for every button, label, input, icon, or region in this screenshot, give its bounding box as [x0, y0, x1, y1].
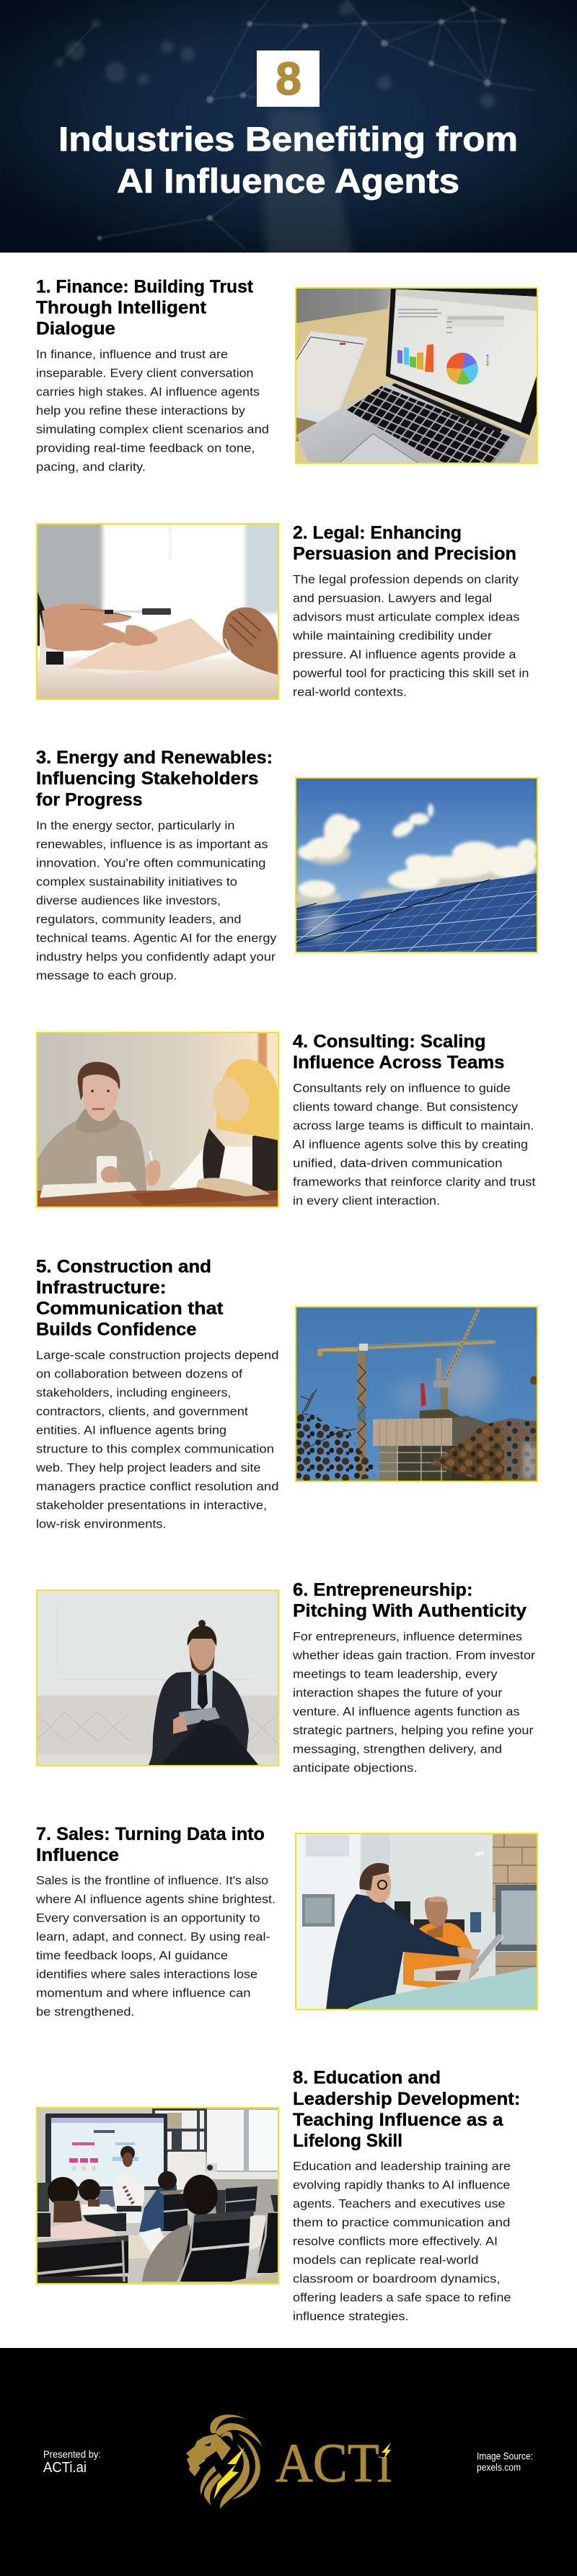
text: construction: managers practice conflict resolution and — [36, 1479, 278, 1494]
text: entrepreneurship: venture. AI influence agents function as — [293, 1704, 519, 1719]
photo: cranes over building — [295, 1306, 538, 1482]
badge: number 8 — [257, 51, 320, 107]
photo: laptop with charts — [295, 287, 538, 464]
text: construction: contractors, clients, and government — [36, 1404, 248, 1419]
heading: energy — [36, 748, 273, 810]
text: entrepreneurship: messaging, strengthen delivery, and — [293, 1742, 502, 1756]
text: energy: industry helps you confidently adapt your — [36, 950, 276, 964]
text: sales: Every conversation is an opportunity to — [36, 1911, 260, 1925]
text: energy: technical teams. Agentic AI for the energy — [36, 931, 277, 945]
text: sales: time feedback loops, AI guidance — [36, 1948, 228, 1963]
text: construction: web. They help project leaders and site — [35, 1460, 260, 1475]
heading: energy: for Progress — [36, 789, 143, 810]
text: consulting: in every client interaction. — [293, 1193, 440, 1208]
text: finance: pacing, and clarity. — [36, 460, 146, 473]
text: energy: regulators, community leaders, and — [36, 912, 241, 926]
text: entrepreneurship: interaction shapes the future of your — [293, 1686, 503, 1700]
image source: pexels.com — [477, 2461, 521, 2473]
text: sales: Sales is the frontline of influence. It's also — [36, 1873, 268, 1888]
heading: sales: 7. Sales: Turning Data into — [36, 1824, 265, 1844]
text: education: them to practice communication and — [293, 2215, 511, 2230]
panel: finance — [36, 277, 538, 473]
text: education: resolve conflicts more effectively. AI — [293, 2234, 498, 2248]
text: construction: on collaboration between dozens of — [36, 1367, 242, 1381]
text: construction: structure to this complex communication — [36, 1442, 274, 1456]
heading: education: Leadership Development: — [293, 2089, 521, 2109]
heading: energy: Influencing Stakeholders — [36, 768, 258, 789]
icon: lion head — [186, 2414, 263, 2509]
heading: education: Lifelong Skill — [293, 2131, 402, 2151]
text: education: influence strategies. — [293, 2309, 408, 2323]
text: legal: pressure. AI influence agents provide a — [293, 648, 516, 661]
text: finance: help you refine these interactions by — [36, 404, 246, 417]
text: construction: stakeholder presentations in interactive, — [36, 1498, 267, 1512]
text: sales: identifies where sales interactions lose — [36, 1967, 257, 1981]
header banner — [0, 0, 577, 260]
photo: classroom presentation — [36, 2107, 279, 2284]
text: sales — [35, 1873, 276, 2019]
panel: energy and renewables — [36, 748, 538, 983]
text: finance: providing real-time feedback on tone, — [36, 442, 255, 455]
text: energy: innovation. You're often communicating — [36, 856, 266, 870]
text: sales: learn, adapt, and connect. By using real- — [36, 1929, 270, 1944]
image source — [477, 2450, 533, 2473]
logo: lion and ACTi wordmark — [186, 2414, 392, 2509]
text: entrepreneurship: For entrepreneurs, influence determines — [293, 1629, 522, 1644]
text: energy — [36, 818, 277, 983]
title: Industries Benefiting from — [58, 120, 518, 158]
text: energy: In the energy sector, particularly in — [36, 818, 235, 833]
heading: finance: Through Intelligent — [36, 297, 207, 317]
panel: sales — [35, 1824, 538, 2019]
text: construction: stakeholders, including engineers, — [36, 1385, 231, 1400]
text: energy: renewables, influence is as important as — [36, 837, 268, 851]
text: legal — [292, 573, 529, 698]
text: construction — [35, 1348, 278, 1531]
text: education: agents. Teachers and executives use — [293, 2196, 505, 2211]
heading: consulting: Influence Across Teams — [293, 1052, 505, 1072]
photo: signing documents — [36, 523, 279, 700]
text: education: evolving rapidly thanks to AI influence — [293, 2178, 511, 2192]
icon: lightning bolt — [382, 2443, 391, 2459]
heading: legal: Persuasion and Precision — [293, 544, 516, 564]
wordmark: ACTi — [276, 2433, 392, 2494]
heading: entrepreneurship: 6. Entrepreneurship: — [293, 1580, 473, 1600]
text: construction: Large-scale construction projects depend — [36, 1348, 278, 1362]
text: legal: The legal profession depends on clarity — [293, 573, 519, 586]
text: education: offering leaders a safe space to refine — [293, 2290, 511, 2305]
heading: finance — [36, 277, 254, 339]
text: energy: diverse audiences like investors, — [36, 893, 221, 908]
text: energy: complex sustainability initiatives to — [36, 875, 237, 889]
panel: construction and infrastructure — [35, 1257, 538, 1531]
text: consulting — [293, 1081, 536, 1208]
text: finance: In finance, influence and trust are — [36, 348, 228, 361]
heading: construction: 5. Construction and — [36, 1257, 211, 1277]
text: education: Education and leadership training are — [293, 2159, 511, 2173]
text: legal: advisors must articulate complex ideas — [293, 610, 519, 623]
text: entrepreneurship: strategic partners, helping you refine your — [293, 1723, 534, 1738]
text: education — [293, 2159, 511, 2323]
photo: businessman with tablet on sofa — [36, 1590, 279, 1766]
text: entrepreneurship: meetings to team leadership, every — [293, 1667, 498, 1681]
text: finance: simulating complex client scenarios and — [36, 423, 269, 436]
text: consulting: frameworks that reinforce clarity and trust — [293, 1175, 536, 1189]
text: legal: while maintaining credibility under — [292, 629, 492, 642]
text: sales: where AI influence agents shine brightest. — [35, 1892, 276, 1906]
text: finance — [36, 348, 269, 473]
heading: construction: Infrastructure: — [36, 1277, 166, 1297]
heading: finance: Dialogue — [36, 319, 115, 339]
heading: education — [293, 2068, 521, 2151]
title — [58, 120, 518, 200]
text: consulting: across large teams is difficult to maintain. — [293, 1118, 534, 1133]
panel: education and leadership — [36, 2068, 521, 2323]
text: entrepreneurship — [292, 1629, 535, 1775]
text: finance: carries high stakes. AI influence agents — [36, 385, 260, 398]
text: construction: entities. AI influence agents bring — [36, 1423, 226, 1437]
heading: legal — [293, 522, 516, 564]
heading: energy: 3. Energy and Renewables: — [36, 748, 273, 768]
title: AI Influence Agents — [117, 162, 459, 200]
heading: entrepreneurship — [293, 1580, 527, 1621]
text: entrepreneurship: anticipate objections. — [293, 1761, 417, 1775]
text: consulting: unified, data-driven communication — [293, 1156, 502, 1170]
photo: solar panels and sky — [295, 777, 538, 953]
heading: consulting: 4. Consulting: Scaling — [293, 1032, 486, 1052]
text: finance: inseparable. Every client conversation — [36, 367, 254, 380]
badge: number 8: 8 — [276, 53, 301, 105]
text: consulting: AI influence agents solve this by creating — [293, 1137, 528, 1152]
heading: legal: 2. Legal: Enhancing — [293, 522, 462, 543]
panel: consulting — [32, 1032, 536, 1212]
heading: finance: 1. Finance: Building Trust — [36, 277, 254, 297]
text: consulting: Consultants rely on influence to guide — [293, 1081, 511, 1095]
text: education: classroom or boardroom dynamics, — [293, 2271, 501, 2286]
heading: education: Teaching Influence as a — [293, 2110, 504, 2130]
text: consulting: clients toward change. But consistency — [293, 1100, 519, 1114]
heading: entrepreneurship: Pitching With Authenticity — [293, 1600, 527, 1621]
text: education: models can replicate real-world — [293, 2253, 479, 2267]
photo: two women talking — [36, 1032, 279, 1208]
text: legal: powerful tool for practicing this skill set in — [293, 667, 529, 680]
heading: construction: Builds Confidence — [36, 1319, 197, 1339]
heading: education: 8. Education and — [293, 2068, 441, 2088]
text: energy: message to each group. — [36, 968, 177, 983]
panel: entrepreneurship — [32, 1580, 535, 1775]
footer — [0, 2348, 577, 2576]
text: construction: low-risk environments. — [36, 1517, 166, 1531]
text: entrepreneurship: whether ideas gain traction. From investor — [292, 1648, 535, 1662]
heading: consulting — [293, 1032, 505, 1072]
heading: construction — [36, 1257, 224, 1339]
text: sales: momentum and where influence can — [36, 1986, 251, 2000]
network graphic — [55, 0, 534, 253]
presented by: Presented by: — [43, 2448, 101, 2460]
text: legal: real-world contexts. — [293, 685, 407, 698]
photo: two men at a laptop — [295, 1833, 538, 2010]
panel: legal — [29, 516, 529, 708]
text: legal: and persuasion. Lawyers and legal — [293, 592, 492, 605]
presented by — [43, 2448, 101, 2476]
text: sales: be strengthened. — [36, 2005, 134, 2019]
heading: sales — [36, 1824, 265, 1865]
heading: construction: Communication that — [36, 1299, 224, 1319]
heading: sales: Influence — [36, 1845, 119, 1865]
image source: Image Source: — [477, 2450, 533, 2462]
presented by: ACTi.ai — [43, 2460, 87, 2476]
